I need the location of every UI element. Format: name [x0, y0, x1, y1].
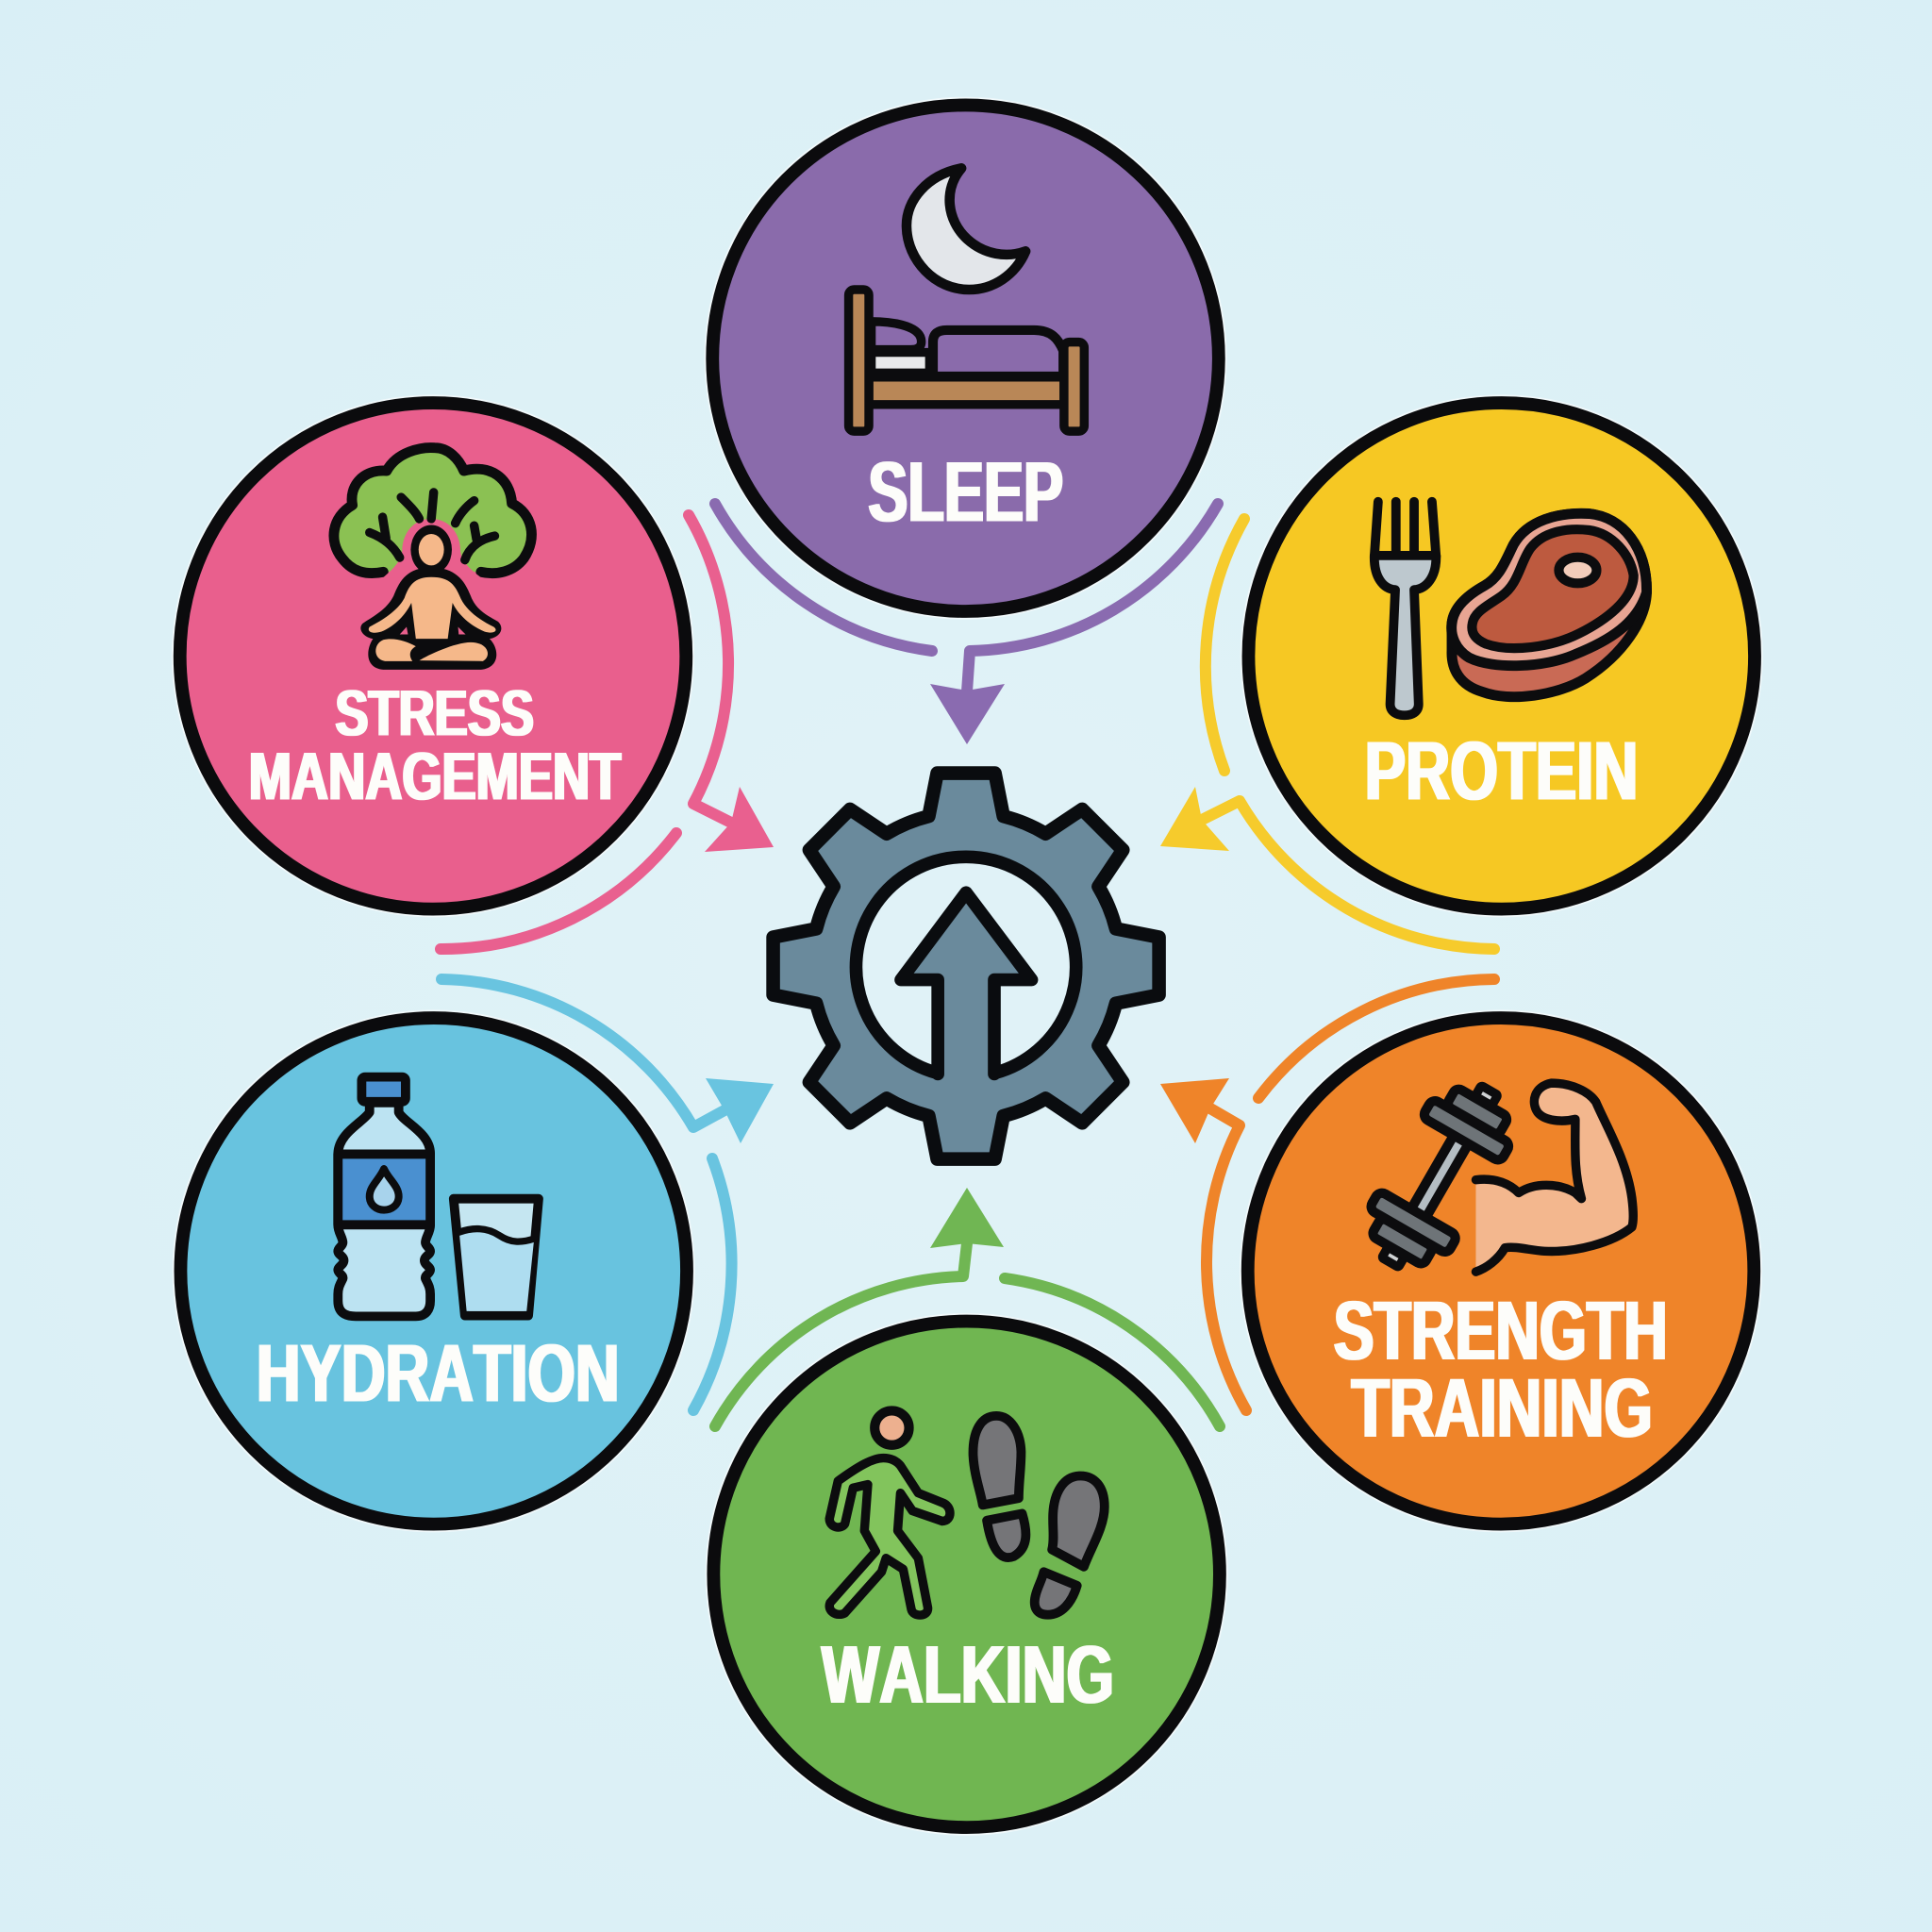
icon: flexed arm [1475, 1083, 1633, 1272]
icon: tree [334, 448, 531, 577]
label: walking: WALKING [822, 1628, 1114, 1720]
icon: bed [849, 290, 1084, 431]
icon: steak [1452, 513, 1647, 697]
icon: meditating person [360, 525, 501, 670]
icon: fork [1374, 502, 1436, 715]
panel: stress management [172, 394, 694, 917]
panel: protein [1241, 394, 1763, 917]
panel: hydration [173, 1009, 695, 1532]
arrow: hydration to centre [441, 979, 774, 1410]
label: strength training: STRENGTH [1334, 1283, 1668, 1377]
label: strength training: TRAINING [1352, 1360, 1653, 1455]
arrow: sleep to centre [715, 504, 1218, 744]
icon: dumbbell [1351, 1068, 1529, 1285]
panel: walking [706, 1313, 1228, 1836]
icon: footprints [974, 1416, 1105, 1615]
arrow: walking to centre [715, 1188, 1220, 1426]
label: protein: PROTEIN [1365, 724, 1638, 817]
panel: sleep [705, 97, 1227, 620]
icon: water bottle [338, 1077, 430, 1316]
label: hydration: HYDRATION [257, 1327, 620, 1419]
icon: glass of water [454, 1199, 539, 1316]
label: stress management [249, 677, 621, 814]
icon: walking person [829, 1410, 950, 1615]
label: sleep: SLEEP [868, 443, 1063, 540]
icon: crescent moon [907, 168, 1025, 290]
central gear with upward arrow [774, 774, 1159, 1159]
label: strength training [1334, 1283, 1668, 1455]
label: stress management: MANAGEMENT [249, 738, 621, 814]
arrow: stress management to centre [441, 515, 774, 949]
arrow: protein to centre [1160, 519, 1494, 949]
panel: strength training [1240, 1009, 1762, 1532]
arrow: strength training to centre [1160, 979, 1494, 1410]
label: stress management: STRESS [335, 677, 534, 750]
